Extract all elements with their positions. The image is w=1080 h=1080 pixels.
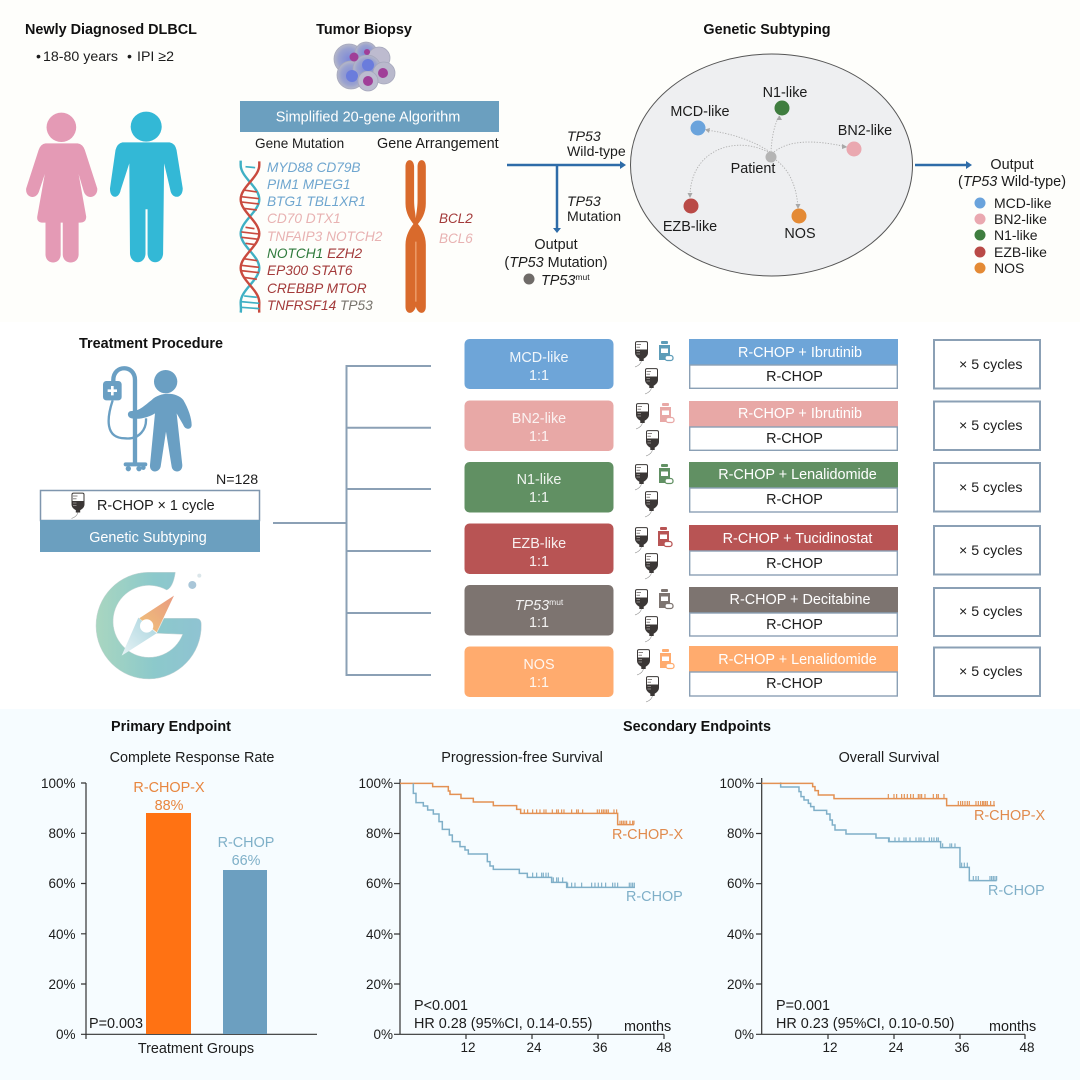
row: EZB-like xyxy=(464,524,1040,579)
heading: Treatment Procedure: Treatment Procedure xyxy=(79,336,223,352)
row: BN2-like: R-CHOP xyxy=(766,431,823,447)
label: R-CHOP-X: R-CHOP-X xyxy=(612,827,684,843)
row: TP53mut: × 5 cycles xyxy=(959,604,1022,620)
row: BN2-like: 1:1 xyxy=(529,429,549,445)
axes: OS: 100% xyxy=(719,776,754,791)
bar: R-CHOP-X: 88% xyxy=(155,798,184,814)
bar: R-CHOP-X: R-CHOP-X xyxy=(133,780,205,796)
row: N1-like: 1:1 xyxy=(529,490,549,506)
subtype labels: EZB-like xyxy=(663,219,717,235)
bar chart axes: 20% xyxy=(48,977,76,992)
axes: PFS: 20% xyxy=(366,977,393,992)
axes: PFS: 12 xyxy=(460,1040,476,1055)
subtype nodes xyxy=(684,100,862,224)
criteria text: 18-80 years xyxy=(43,49,118,65)
gene list: TNFAIP3 NOTCH2 xyxy=(267,229,383,244)
gene list: MYD88 CD79B xyxy=(267,160,361,175)
column label: Gene Mutation: Gene Mutation xyxy=(255,136,344,151)
axes: OS: 24 xyxy=(888,1040,904,1055)
statistics: OS: HR 0.23 (95%CI, 0.10-0.50) xyxy=(776,1016,954,1032)
bar: R-CHOP: 66% xyxy=(232,853,261,869)
row: N1-like: R-CHOP + Lenalidomide xyxy=(718,467,877,483)
bar chart axes: 80% xyxy=(48,826,76,841)
subtype labels: N1-like xyxy=(763,85,807,101)
icon: chromosome xyxy=(405,160,426,313)
icon: DNA helix xyxy=(241,161,259,313)
bar: R-CHOP xyxy=(218,835,274,1034)
statistics: PFS: P<0.001 xyxy=(414,998,468,1014)
subtype labels: BN2-like xyxy=(838,123,892,139)
output: TP53 mutation: Output xyxy=(534,237,578,253)
gene list: BTG1 TBL1XR1 xyxy=(267,194,366,209)
bar: R-CHOP-X xyxy=(133,780,205,1034)
label: TP53 mutation: Mutation xyxy=(567,208,621,224)
row: EZB-like: 1:1 xyxy=(529,554,549,570)
axes: PFS: 40% xyxy=(366,927,393,942)
output legend: wild-type: NOS xyxy=(994,260,1024,276)
output legend: wild-type: (TP53 Wild-type) xyxy=(958,174,1066,190)
icon: patient with IV xyxy=(103,368,192,471)
p value: P=0.003 xyxy=(89,1016,143,1032)
row: BN2-like: × 5 cycles xyxy=(959,418,1022,434)
axes: OS: 60% xyxy=(727,876,754,891)
subtype labels: NOS xyxy=(784,226,816,242)
box: Genetic Subtyping: Genetic Subtyping xyxy=(89,530,207,546)
label: R-CHOP-X: R-CHOP-X xyxy=(974,808,1046,824)
tree connector xyxy=(273,366,431,675)
heading: Newly Diagnosed DLBCL: Newly Diagnosed DLBCL xyxy=(25,22,197,38)
algorithm banner: Simplified 20-gene Algorithm xyxy=(276,110,460,126)
row: BN2-like: R-CHOP + Ibrutinib xyxy=(738,406,862,422)
output legend: wild-type: Output xyxy=(990,157,1034,173)
label: R-CHOP: R-CHOP xyxy=(626,889,683,905)
output: TP53 mutation: TP53 xyxy=(541,273,575,289)
axes: PFS: 24 xyxy=(526,1040,542,1055)
axes: PFS: 80% xyxy=(366,826,393,841)
arrow: to output xyxy=(915,161,972,169)
subtype labels: MCD-like xyxy=(670,104,730,120)
axes: PFS: 36 xyxy=(592,1040,608,1055)
panel: genetic subtyping xyxy=(630,22,1066,276)
arrangement gene: BCL2: BCL2 xyxy=(439,211,473,226)
axes: OS xyxy=(719,776,1036,1055)
row: N1-like: N1-like xyxy=(517,472,561,488)
gene list: NOTCH1 EZH2 xyxy=(267,246,362,261)
heading: Tumor Biopsy: Tumor Biopsy xyxy=(316,22,412,38)
row: TP53mut: mut xyxy=(549,597,564,607)
row: NOS: R-CHOP + Lenalidomide xyxy=(718,652,877,668)
bar chart axes: 40% xyxy=(48,927,76,942)
subtype labels xyxy=(663,85,892,242)
output: TP53 mutation: (TP53 Mutation) xyxy=(504,255,608,271)
KM curve: R-CHOP-X OS xyxy=(762,783,995,806)
subtype labels: Patient xyxy=(731,161,775,177)
row: NOS: 1:1 xyxy=(529,675,549,691)
row: N1-like xyxy=(464,462,1040,517)
output legend: wild-type: N1-like xyxy=(994,227,1038,243)
subtitle: PFS: Progression-free Survival xyxy=(441,750,603,766)
subtyping ellipse xyxy=(630,54,912,276)
axes: PFS: 0% xyxy=(373,1027,393,1042)
row: NOS xyxy=(464,646,1040,702)
arrow: TP53 mutation output xyxy=(553,165,561,233)
row: MCD-like: R-CHOP + Ibrutinib xyxy=(738,345,862,361)
icon: female figure xyxy=(26,113,97,262)
criteria text: • xyxy=(36,49,41,65)
row: EZB-like: R-CHOP xyxy=(766,556,823,572)
box: R-CHOP 1 cycle: R-CHOP × 1 cycle xyxy=(97,498,215,514)
row: NOS: × 5 cycles xyxy=(959,664,1022,680)
heading: Secondary Endpoints: Secondary Endpoints xyxy=(623,719,771,735)
bar chart axes xyxy=(41,776,317,1042)
gene list: CD70 DTX1 xyxy=(267,211,341,226)
row: NOS: R-CHOP xyxy=(766,676,823,692)
output legend: wild-type: MCD-like xyxy=(994,195,1052,211)
logo xyxy=(96,572,201,679)
box: Genetic Subtyping xyxy=(40,520,260,552)
row: MCD-like: 1:1 xyxy=(529,368,549,384)
axes: OS: 36 xyxy=(954,1040,970,1055)
criteria text: IPI ≥2 xyxy=(137,49,174,65)
row: TP53mut xyxy=(464,585,1040,642)
row: BN2-like: BN2-like xyxy=(512,411,566,427)
gene list: PIM1 MPEG1 xyxy=(267,177,351,192)
gene list: CREBBP MTOR xyxy=(267,281,367,296)
bar: R-CHOP: R-CHOP xyxy=(218,835,274,851)
icon: male figure xyxy=(110,112,183,262)
bar chart axes: 60% xyxy=(48,876,76,891)
column label: Gene Arrangement: Gene Arrangement xyxy=(377,136,499,152)
label: N=128: N=128 xyxy=(216,472,258,488)
bar chart axes: 0% xyxy=(56,1027,76,1042)
statistics: PFS: HR 0.28 (95%CI, 0.14-0.55) xyxy=(414,1016,592,1032)
axes: OS: 20% xyxy=(727,977,754,992)
panel: patient population xyxy=(25,22,197,262)
axes: OS: 40% xyxy=(727,927,754,942)
row: TP53mut: 1:1 xyxy=(529,615,549,631)
subtitle: OS: Overall Survival xyxy=(839,750,939,766)
statistics: OS: P=0.001 xyxy=(776,998,830,1014)
heading: Genetic Subtyping: Genetic Subtyping xyxy=(703,22,831,38)
KM curve: R-CHOP-X PFS xyxy=(400,783,634,825)
connector curves xyxy=(688,116,848,209)
axes: PFS: months xyxy=(624,1019,671,1035)
bar chart axes: 100% xyxy=(41,776,76,791)
axes: PFS: 60% xyxy=(366,876,393,891)
row: MCD-like: × 5 cycles xyxy=(959,357,1022,373)
algorithm banner xyxy=(240,101,499,132)
axes: PFS: 48 xyxy=(656,1040,672,1055)
criteria text: • xyxy=(127,49,132,65)
axes: PFS: 100% xyxy=(358,776,393,791)
axes: OS: 12 xyxy=(822,1040,838,1055)
row: NOS: NOS xyxy=(523,657,555,673)
row: EZB-like: R-CHOP + Tucidinostat xyxy=(723,531,872,547)
output: TP53 mutation xyxy=(504,237,608,289)
row: TP53mut: R-CHOP xyxy=(766,617,823,633)
axes: PFS xyxy=(358,776,672,1055)
panel: progression-free survival xyxy=(358,750,684,1055)
KM curve: R-CHOP PFS xyxy=(413,783,635,887)
subtitle: Complete Response Rate: Complete Response Rate xyxy=(110,750,274,766)
axes: OS: months xyxy=(989,1019,1036,1035)
output legend: wild-type: BN2-like xyxy=(994,211,1047,227)
label: R-CHOP: R-CHOP xyxy=(988,883,1045,899)
row: MCD-like: R-CHOP xyxy=(766,369,823,385)
icon: tumor cell cluster xyxy=(334,42,395,91)
output legend: wild-type: EZB-like xyxy=(994,244,1047,260)
row: EZB-like: × 5 cycles xyxy=(959,543,1022,559)
gene list: EP300 STAT6 xyxy=(267,263,353,278)
axes: OS: 80% xyxy=(727,826,754,841)
arrangement gene: BCL6: BCL6 xyxy=(439,231,473,246)
panel: treatment procedure xyxy=(40,336,1040,702)
panel: overall survival xyxy=(719,750,1046,1055)
arrows: TP53 branch xyxy=(504,128,626,289)
gene list xyxy=(267,160,383,313)
gene list: TNFRSF14 TP53 xyxy=(267,298,373,313)
row: TP53mut: TP53 xyxy=(515,598,549,614)
panel: primary endpoint xyxy=(41,719,317,1057)
box: R-CHOP 1 cycle xyxy=(40,490,260,520)
label: TP53 wild-type: Wild-type xyxy=(567,143,626,159)
row: BN2-like xyxy=(464,400,1040,456)
label: TP53 wild-type: TP53 xyxy=(567,128,601,144)
row: TP53mut: R-CHOP + Decitabine xyxy=(730,592,870,608)
output: TP53 mutation: mut xyxy=(575,272,590,282)
x-axis title: Treatment Groups xyxy=(138,1041,254,1057)
row: MCD-like xyxy=(464,339,1040,394)
row: MCD-like: MCD-like xyxy=(509,350,569,366)
panel: tumor biopsy and algorithm xyxy=(240,22,499,313)
row: EZB-like: EZB-like xyxy=(512,536,566,552)
arrow: to genetic subtyping xyxy=(507,161,626,169)
axes: OS: 0% xyxy=(734,1027,754,1042)
axes: OS: 48 xyxy=(1019,1040,1035,1055)
label: TP53 mutation: TP53 xyxy=(567,193,601,209)
heading: Primary Endpoint: Primary Endpoint xyxy=(111,719,231,735)
row: N1-like: R-CHOP xyxy=(766,492,823,508)
output legend: wild-type xyxy=(958,157,1066,276)
KM curve: R-CHOP OS xyxy=(781,782,997,881)
row: N1-like: × 5 cycles xyxy=(959,480,1022,496)
